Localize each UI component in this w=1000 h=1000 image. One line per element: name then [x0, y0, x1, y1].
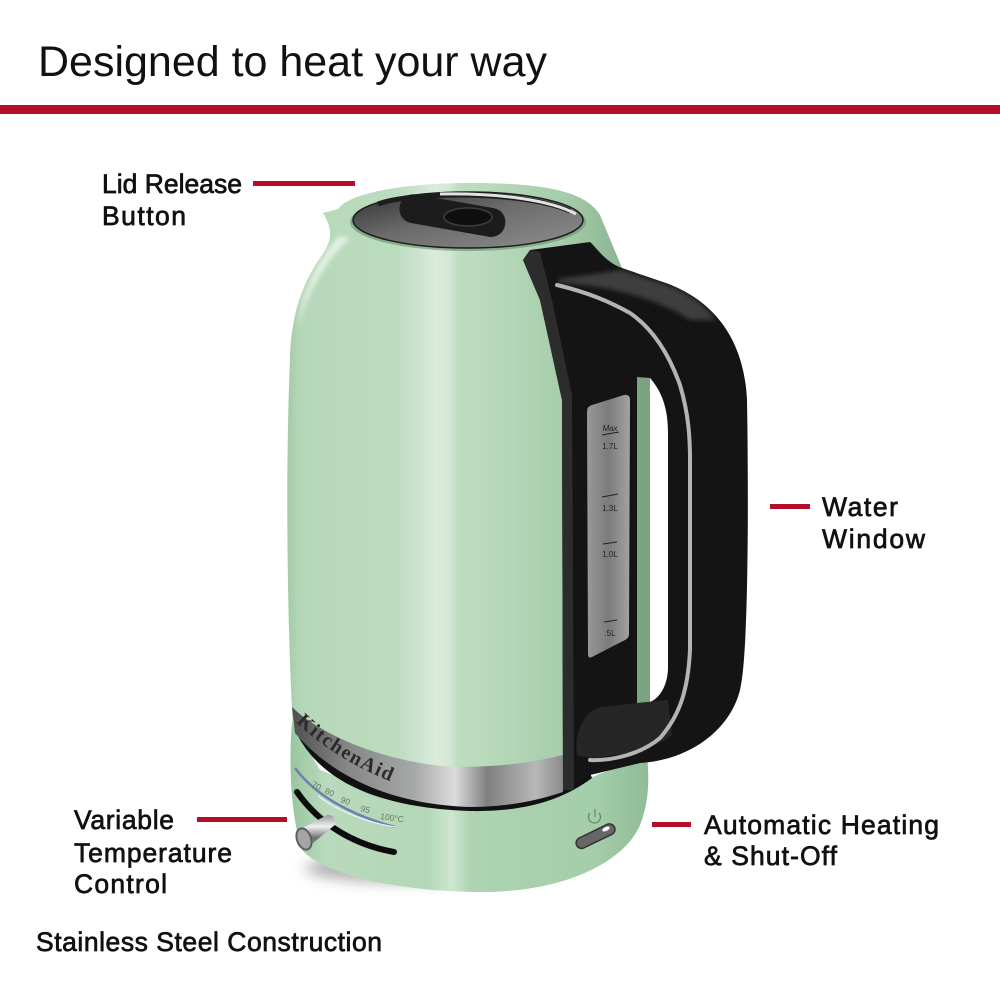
brand text: KitchenAid — [296, 712, 394, 782]
lid — [350, 192, 586, 251]
side strip — [523, 250, 574, 790]
water window gauge: 1.3L — [602, 504, 618, 513]
callout: lid release button — [102, 169, 355, 231]
water window gauge: 1.7L — [602, 442, 618, 451]
callout: variable temperature control: Variable — [74, 805, 174, 835]
callout: variable temperature control — [74, 805, 287, 899]
lower grip — [577, 700, 672, 758]
title: Designed to heat your way — [38, 38, 548, 86]
steel band with brand — [292, 707, 563, 807]
power button — [574, 809, 617, 850]
callout: automatic heating and shut-off — [652, 810, 939, 871]
callout: water window — [770, 492, 926, 554]
lid release button — [397, 192, 508, 239]
water window gauge: .5L — [604, 629, 616, 638]
temperature scale — [295, 768, 405, 827]
temperature knob — [294, 815, 336, 852]
temperature scale: 90 — [339, 794, 352, 807]
callout: automatic heating and shut-off: & Shut-Off — [704, 841, 838, 871]
temperature scale: 100°C — [380, 811, 405, 824]
callout: lid release button: Lid Release — [102, 169, 242, 199]
chrome trim — [557, 285, 690, 760]
temperature scale: 70 — [310, 779, 323, 792]
shoulder highlight — [297, 236, 350, 330]
kettle illustration — [287, 183, 748, 892]
water window gauge: 1.0L — [602, 550, 618, 559]
temperature scale: 95 — [360, 803, 371, 815]
callout: variable temperature control: Control — [74, 869, 167, 899]
base — [290, 722, 648, 892]
callout: lid release button: Button — [102, 201, 186, 231]
window opening in green strip — [637, 377, 650, 704]
temperature slot — [297, 792, 394, 852]
callout: water window: Window — [822, 524, 926, 554]
water window gauge — [587, 395, 630, 658]
footer note: Stainless Steel Construction — [36, 927, 382, 957]
callout: variable temperature control: Temperature — [74, 838, 232, 868]
handle shell — [523, 242, 748, 790]
kettle body — [287, 183, 650, 805]
handle — [523, 242, 748, 790]
handle top sheen — [558, 270, 716, 320]
power icon — [588, 809, 601, 823]
kettle shadow — [305, 854, 495, 882]
header rule — [0, 105, 1000, 114]
temperature scale: 80 — [323, 786, 336, 799]
callout: automatic heating and shut-off: Automatic Heating — [704, 810, 939, 840]
water window gauge: Max — [602, 424, 619, 433]
callout: water window: Water — [822, 492, 898, 522]
dark gap under band — [296, 732, 592, 811]
